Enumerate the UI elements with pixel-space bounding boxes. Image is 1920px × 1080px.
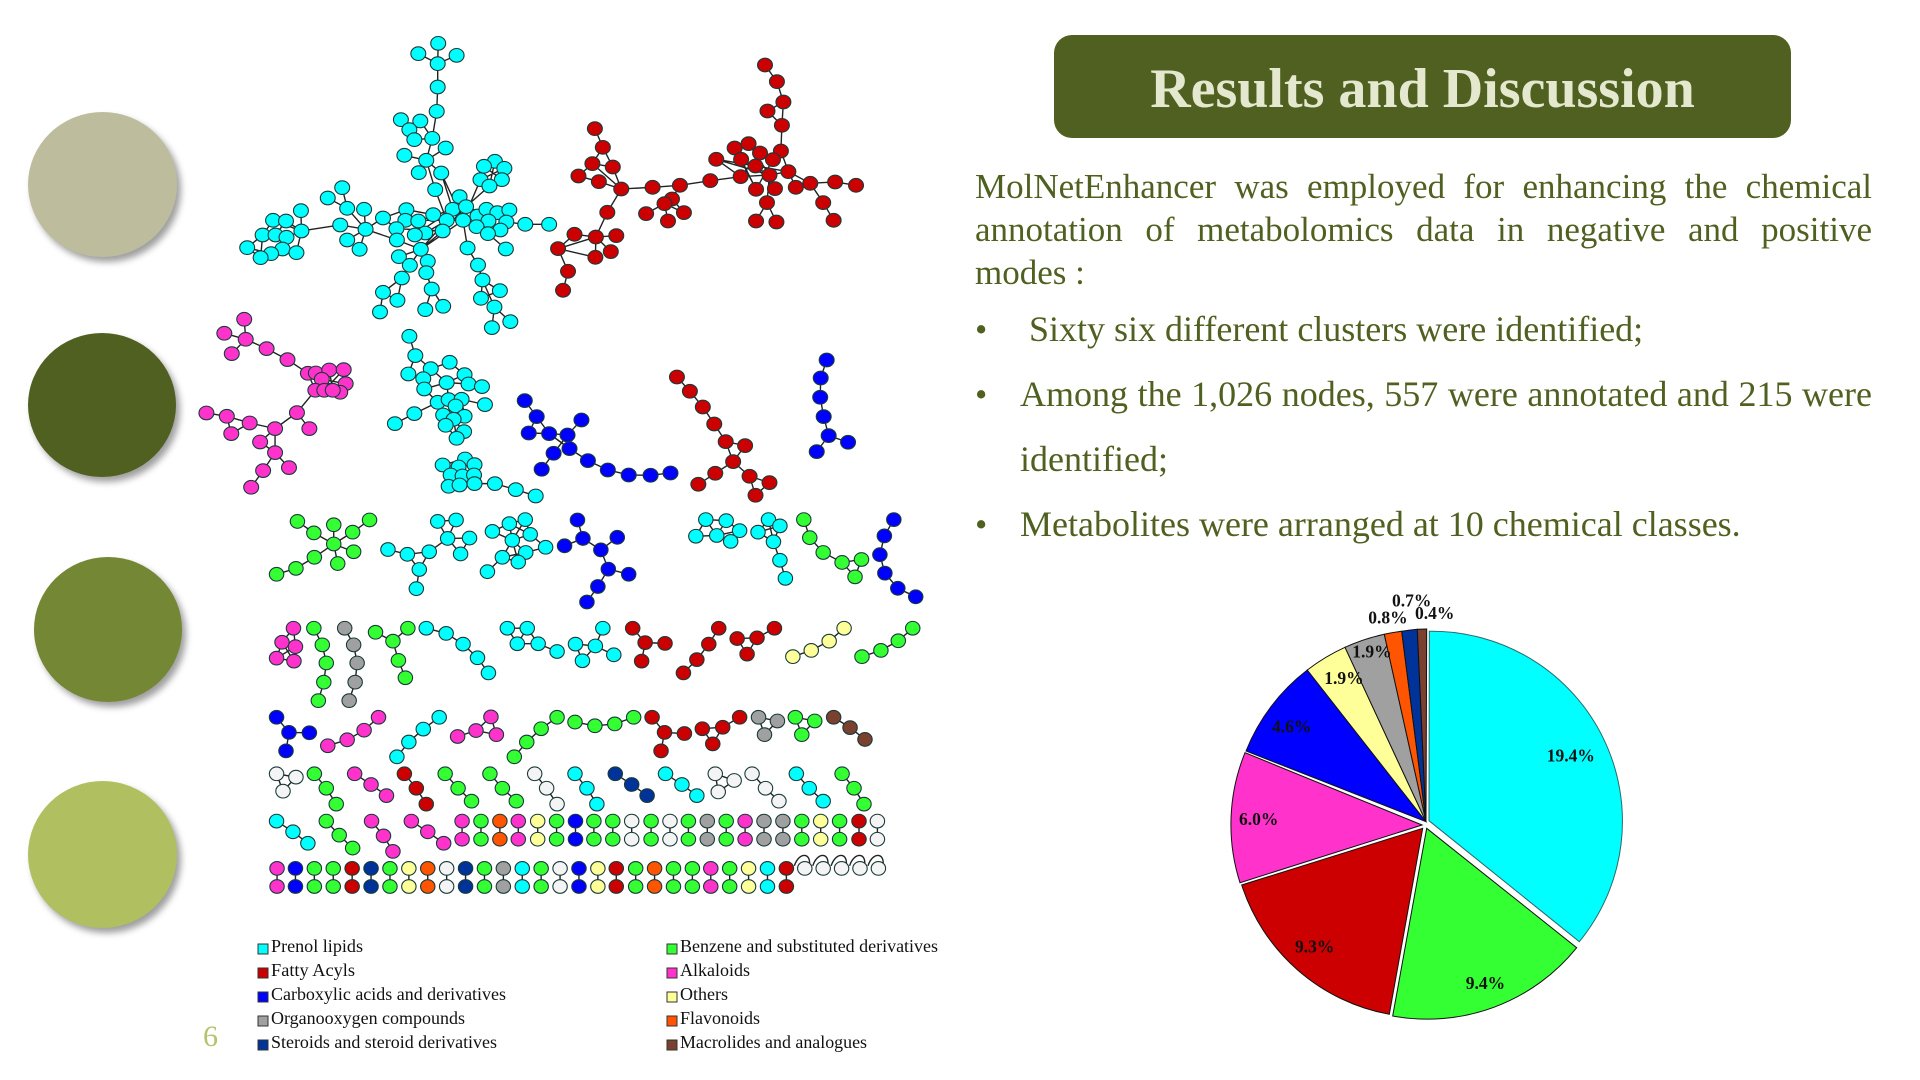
legend: Others	[680, 984, 728, 1004]
slice: organooxygen compounds	[1345, 634, 1426, 822]
pie percentage labels: 19.4%	[1547, 746, 1595, 766]
bullet list: •	[975, 310, 987, 349]
bullet list: •	[975, 375, 987, 414]
row 5 chains and node pairs	[269, 814, 885, 858]
bullet list: Sixty six different clusters were identified;	[1029, 309, 1643, 349]
pie percentage labels: 9.3%	[1295, 936, 1334, 956]
bullet list: Among the 1,026 nodes, 557 were annotated and 215 were	[1020, 374, 1872, 414]
slice: alkaloids	[1231, 753, 1422, 883]
row 1 small clusters	[269, 513, 923, 609]
intro paragraph	[975, 167, 1872, 292]
cluster: prenol lipids small network	[435, 452, 543, 503]
legend: Benzene and substituted derivatives	[680, 936, 938, 956]
cluster: carboxylic acids network	[517, 394, 678, 482]
pie percentage labels: 1.9%	[1352, 642, 1392, 662]
slice: prenol lipids	[1429, 631, 1622, 942]
bullet list: Metabolites were arranged at 10 chemical classes.	[1020, 504, 1741, 544]
legend: Fatty Acyls	[271, 960, 355, 980]
slice: benzene derivatives	[1393, 828, 1577, 1019]
legend: Flavonoids	[680, 1008, 760, 1028]
pie percentage labels: 0.8%	[1368, 607, 1408, 627]
pie percentage labels: 1.9%	[1324, 668, 1364, 688]
legend: Prenol lipids	[271, 936, 363, 956]
intro paragraph: MolNetEnhancer was employed for enhancing the chemical	[975, 167, 1872, 206]
pie percentage labels: 9.4%	[1466, 973, 1505, 993]
cluster: fatty acyls chain	[669, 370, 777, 502]
title banner	[1054, 35, 1791, 138]
pie percentage labels: 4.6%	[1272, 717, 1311, 737]
legend: Carboxylic acids and derivatives	[271, 984, 506, 1004]
cluster: alkaloids network	[199, 312, 353, 494]
title banner: Results and Discussion	[1150, 58, 1695, 120]
cluster: carboxylic acids chain	[809, 353, 856, 458]
slice: macrolides	[1417, 629, 1427, 822]
slice: others	[1307, 647, 1426, 822]
bullet list	[975, 309, 1872, 544]
slice: fatty acyls	[1242, 828, 1423, 1014]
slice: steroids	[1402, 629, 1426, 822]
decorative disc: light olive	[28, 781, 177, 928]
pie percentage labels: 0.7%	[1392, 591, 1431, 611]
row 6 node pairs and self-loops	[270, 855, 886, 893]
decorative disc: pale khaki	[28, 112, 177, 257]
cluster: prenol lipids mid network	[387, 329, 492, 445]
bullet list: •	[975, 505, 987, 544]
legend: Organooxygen compounds	[271, 1008, 465, 1028]
legend: Alkaloids	[680, 960, 750, 980]
intro paragraph: modes :	[975, 253, 1085, 292]
page number: 6	[203, 1020, 218, 1053]
cluster: large fatty acyls network	[551, 58, 863, 297]
bullet list: identified;	[1020, 439, 1168, 479]
decorative disc: mid olive	[34, 557, 182, 702]
cluster: large prenol lipids network	[240, 36, 557, 334]
slice: carboxylic acids	[1246, 670, 1426, 822]
pie percentage labels: 0.4%	[1415, 603, 1454, 623]
legend: Steroids and steroid derivatives	[271, 1032, 497, 1052]
pie percentage labels	[1239, 591, 1595, 993]
row 4 three-node chains	[269, 767, 871, 811]
intro paragraph: annotation of metabolomics data in negative and positive	[975, 210, 1872, 249]
pie percentage labels: 6.0%	[1239, 809, 1278, 829]
legend: Macrolides and analogues	[680, 1032, 867, 1052]
decorative disc: dark olive	[28, 333, 176, 477]
row 2 small clusters	[269, 621, 920, 707]
row 3 small clusters	[269, 710, 872, 764]
slice: flavonoids	[1384, 631, 1426, 822]
